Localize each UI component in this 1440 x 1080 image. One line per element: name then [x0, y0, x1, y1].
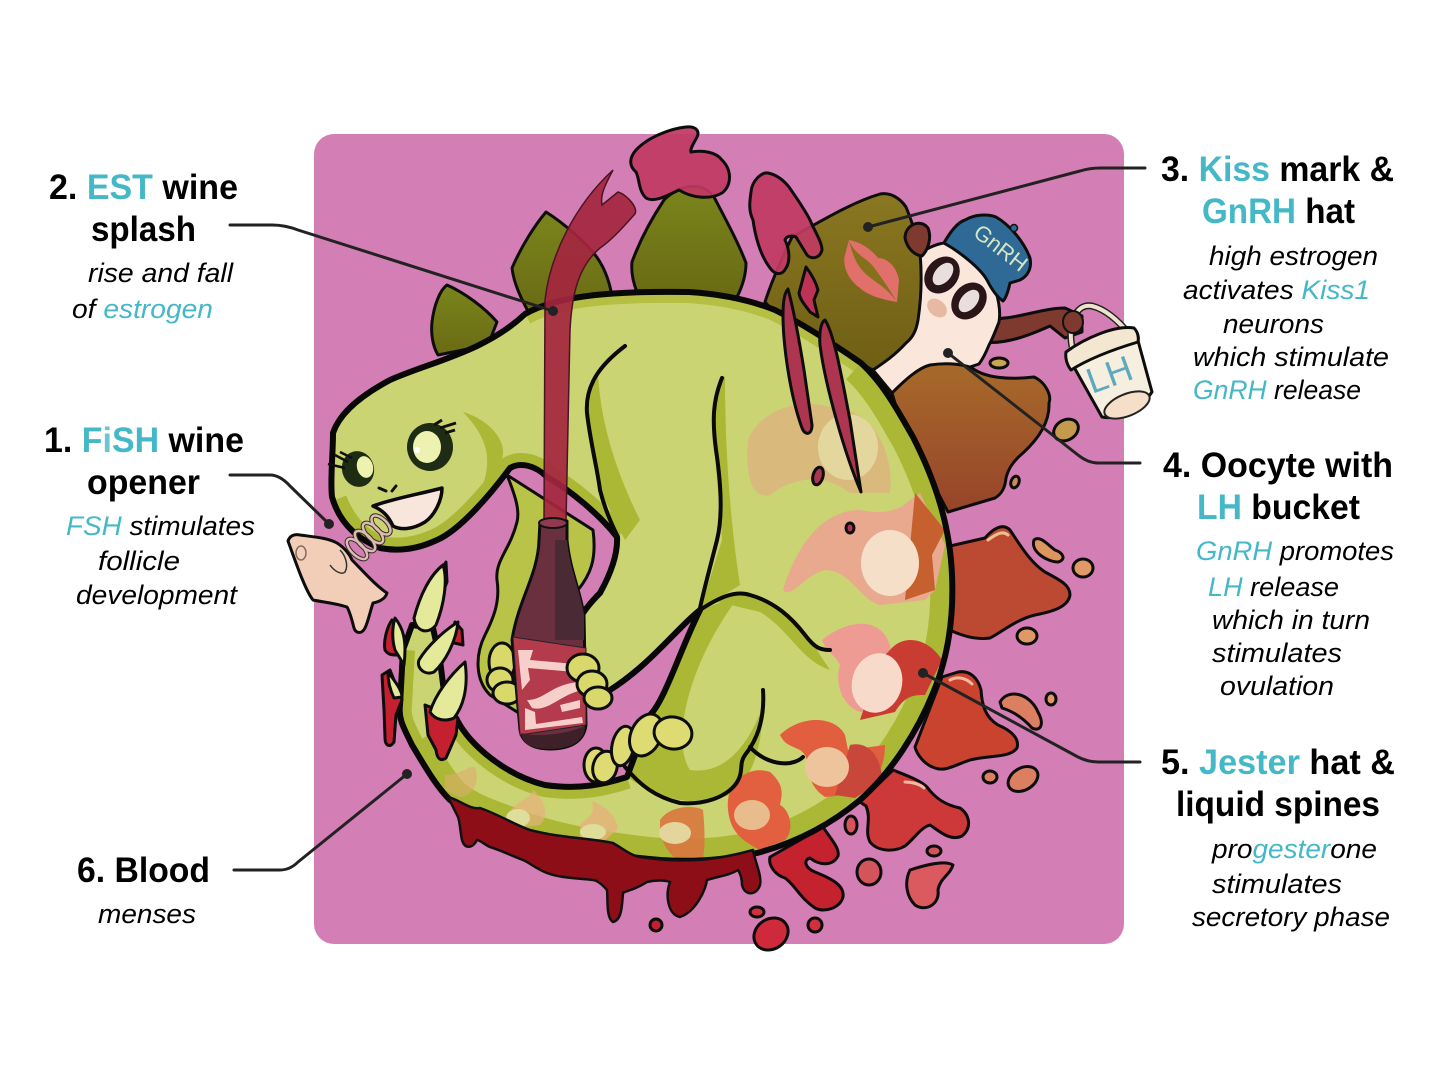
leader lines — [230, 168, 1145, 870]
description 5: progesterone — [1211, 834, 1377, 864]
body top rim shading — [525, 292, 861, 363]
body right rim shading — [412, 363, 952, 861]
description 3 — [1183, 241, 1389, 405]
description 2: rise and fall — [88, 258, 234, 288]
heading 2 — [49, 168, 238, 249]
description 4: which in turn — [1212, 605, 1370, 635]
follicle patch 1 — [747, 404, 891, 496]
back arm — [478, 475, 594, 720]
description 4 — [1196, 536, 1394, 701]
inner edges shading — [335, 465, 627, 787]
oocyte eyes — [917, 249, 994, 327]
brown plate — [892, 364, 1050, 512]
toes — [584, 709, 694, 786]
description 4: LH release — [1208, 572, 1339, 602]
heading 3: 3. Kiss mark & — [1161, 150, 1394, 189]
description 5: secretory phase — [1192, 902, 1390, 932]
deep red plate — [770, 827, 843, 910]
follicle patch 4 — [780, 720, 885, 798]
jester cap GnRH — [944, 215, 1032, 301]
head details — [328, 420, 456, 529]
wine bottle — [512, 518, 586, 749]
leader 3 — [863, 168, 1145, 232]
oocyte face — [873, 243, 1000, 393]
background panel — [314, 134, 1124, 944]
description 6: menses — [98, 899, 196, 929]
claws with blood — [382, 562, 466, 760]
description 3: activates Kiss1 — [1183, 275, 1370, 305]
description 2 — [72, 258, 234, 324]
blood on tail — [448, 797, 760, 922]
fish — [288, 535, 387, 632]
description 3: which stimulate — [1193, 342, 1389, 372]
description 5: stimulates — [1212, 869, 1342, 899]
heading 4 — [1163, 446, 1393, 527]
nostrils — [379, 486, 396, 491]
kiss lips — [844, 240, 899, 302]
follicle patch 3 — [822, 624, 942, 720]
heading 5: 5. Jester hat & — [1161, 743, 1395, 782]
wine stream — [544, 170, 636, 522]
jester cap GnRH: GnRH — [969, 219, 1032, 277]
label 6: Blood — [77, 851, 210, 929]
label 2: EST wine splash — [49, 168, 238, 324]
crimson plate — [860, 770, 969, 850]
heading 1: opener — [87, 463, 200, 502]
label 5: Jester hat and liquid spines — [1161, 743, 1395, 932]
leader 1 — [230, 475, 334, 529]
heading 3: GnRH hat — [1202, 192, 1355, 231]
mouth with teeth — [373, 488, 442, 529]
heading 4: LH bucket — [1197, 488, 1360, 527]
description 3: neurons — [1223, 309, 1324, 339]
illustration: dinosaur cycle — [288, 127, 1153, 957]
LH bucket: LH — [1081, 347, 1138, 402]
heading 2: splash — [91, 210, 196, 249]
leader 6 — [234, 769, 412, 870]
droplets — [650, 358, 1093, 957]
description 3: GnRH release — [1193, 375, 1361, 405]
faint tail patches — [445, 767, 704, 858]
red plate — [915, 672, 1018, 769]
follicle patch 5 — [728, 770, 790, 850]
description 1: FSH stimulates — [66, 511, 255, 541]
corkscrew — [344, 512, 394, 562]
right eye — [407, 420, 456, 471]
front fingers on bottle — [567, 654, 612, 709]
follicle patch 2 — [783, 493, 945, 605]
wine blob 1 — [631, 127, 730, 200]
orange-red plate — [950, 527, 1070, 638]
description 4: stimulates — [1212, 638, 1342, 668]
bucket handle — [1071, 306, 1130, 347]
back hand fingers — [487, 643, 521, 704]
body outline — [331, 292, 952, 861]
leader 5 — [918, 668, 1140, 762]
leader 2 — [230, 225, 558, 316]
description 4: ovulation — [1220, 671, 1334, 701]
leader 4 — [943, 348, 1140, 463]
label 4: Oocyte with LH bucket — [1163, 446, 1394, 701]
bucket cup — [1070, 337, 1152, 418]
inner body lines — [587, 346, 830, 803]
heading 3 — [1161, 150, 1394, 231]
oocyte arm — [982, 308, 1082, 343]
description 3: high estrogen — [1209, 241, 1378, 271]
description 2: of estrogen — [72, 294, 213, 324]
left eye — [328, 447, 378, 491]
wine label — [513, 637, 586, 735]
heading 1: 1. FiSH wine — [44, 421, 244, 460]
description 4: GnRH promotes — [1196, 536, 1394, 566]
bucket hand — [1063, 311, 1083, 333]
dinosaur body — [331, 292, 952, 861]
heading 4: 4. Oocyte with — [1163, 446, 1393, 485]
description 5 — [1192, 834, 1390, 932]
LH bucket — [1063, 306, 1153, 424]
plate with kiss mark — [765, 194, 930, 370]
description 1: development — [76, 580, 239, 610]
heading 5 — [1161, 743, 1395, 824]
back plates: olive — [432, 186, 746, 355]
heading 5: liquid spines — [1176, 785, 1380, 824]
head shading — [463, 412, 504, 482]
heading 6: 6. Blood — [77, 851, 210, 890]
wine drips and spines — [783, 267, 861, 533]
description 1 — [66, 511, 255, 610]
description 1: follicle — [98, 546, 180, 576]
wine blob 2 — [750, 173, 822, 274]
heading 2: 2. EST wine — [49, 168, 238, 207]
hand holding plate — [905, 223, 930, 256]
heading 1 — [44, 421, 244, 502]
oocyte character — [873, 215, 1082, 393]
label 3: Kiss mark and GnRH hat — [1161, 150, 1394, 405]
label 1: FiSH wine opener — [44, 421, 255, 610]
